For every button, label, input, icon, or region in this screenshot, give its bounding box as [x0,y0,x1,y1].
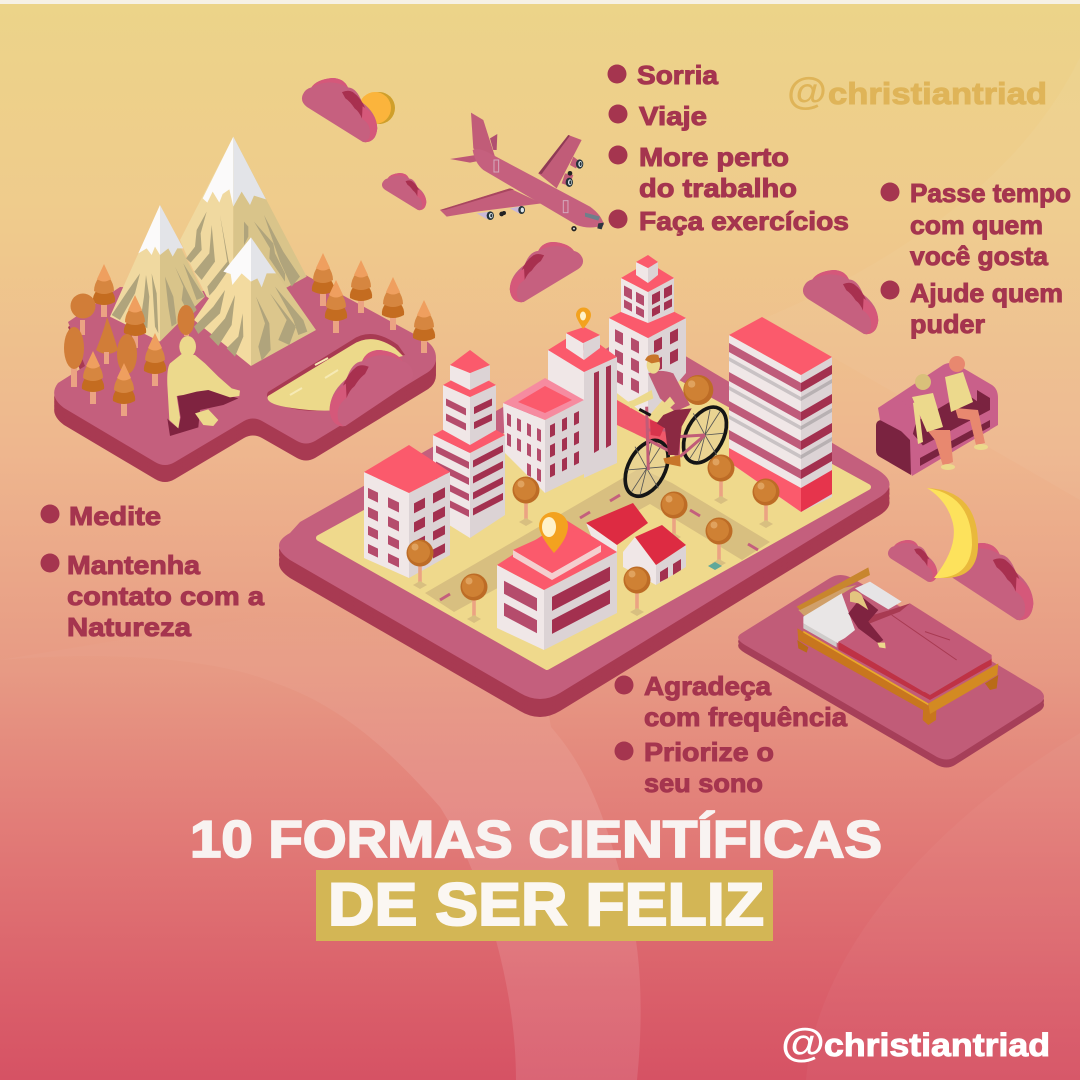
list: left: Natureza [67,612,192,642]
building: front left [364,445,450,578]
airplane [440,113,604,231]
person left [912,374,955,470]
cloud: below plane [510,242,583,302]
list: top right: Passe tempo [910,178,1071,208]
cloud over lake [330,350,413,426]
building: front with pin [497,512,617,650]
handle bottom right: christiantriad [824,1027,1050,1063]
handle top right [787,71,1047,113]
list: bottom: Agradeça [644,671,772,701]
list: bottom [614,671,848,798]
teal marker [708,562,722,570]
sun behind cloud [359,92,395,124]
city platform [279,334,890,717]
handle top right: @ [787,71,827,113]
list: bottom: seu sono [644,768,763,798]
meditating person [167,336,240,436]
list: left [40,501,265,642]
building: center with pin [503,308,617,493]
cloud: right of city [803,270,878,334]
trees in front [624,566,650,616]
building: stepped tower [433,350,505,538]
list: left: Mantenha [67,550,201,580]
cloud: upper left [302,78,377,142]
left mountain [110,205,205,342]
building: tall striped [729,317,832,512]
forest [64,253,435,416]
list: bottom: com frequência [644,702,848,732]
handle top right: christiantriad [828,76,1047,111]
lake [267,334,405,411]
couch with two people [876,356,998,476]
list: top right: puder [910,309,985,339]
list: left: Medite [69,501,161,531]
cloud: small [382,173,426,210]
list: top center: More perto [639,142,789,172]
trees in city [406,454,780,623]
list: top right [880,178,1071,339]
big mountain [180,137,307,317]
cyclist [616,354,735,503]
list: top center: Faça exercícios [639,206,849,236]
handle bottom right: @ [781,1021,825,1065]
list: top right: com quem [910,210,1043,240]
list: top right: Ajude quem [910,278,1063,308]
houses [586,503,686,585]
nature platform [54,272,436,482]
moon and clouds [888,488,1033,620]
front mountain [194,237,316,366]
title: 10 FORMAS CIENTÍFICAS [190,811,882,869]
handle bottom right [781,1021,1050,1065]
list: top center: do trabalho [639,173,797,203]
mountains [110,137,316,366]
list: left: contato com a [67,581,265,611]
list: top right: você gosta [910,241,1049,271]
list: bottom: Priorize o [644,737,774,767]
person right [945,356,988,450]
bed platform [738,575,1044,768]
building: back tower [609,255,686,417]
list: top center [608,60,849,236]
title: DE SER FELIZ [328,871,764,938]
title [190,811,882,941]
list: top center: Viaje [639,101,707,131]
bed with sleeper [797,567,998,725]
list: top center: Sorria [637,60,719,90]
